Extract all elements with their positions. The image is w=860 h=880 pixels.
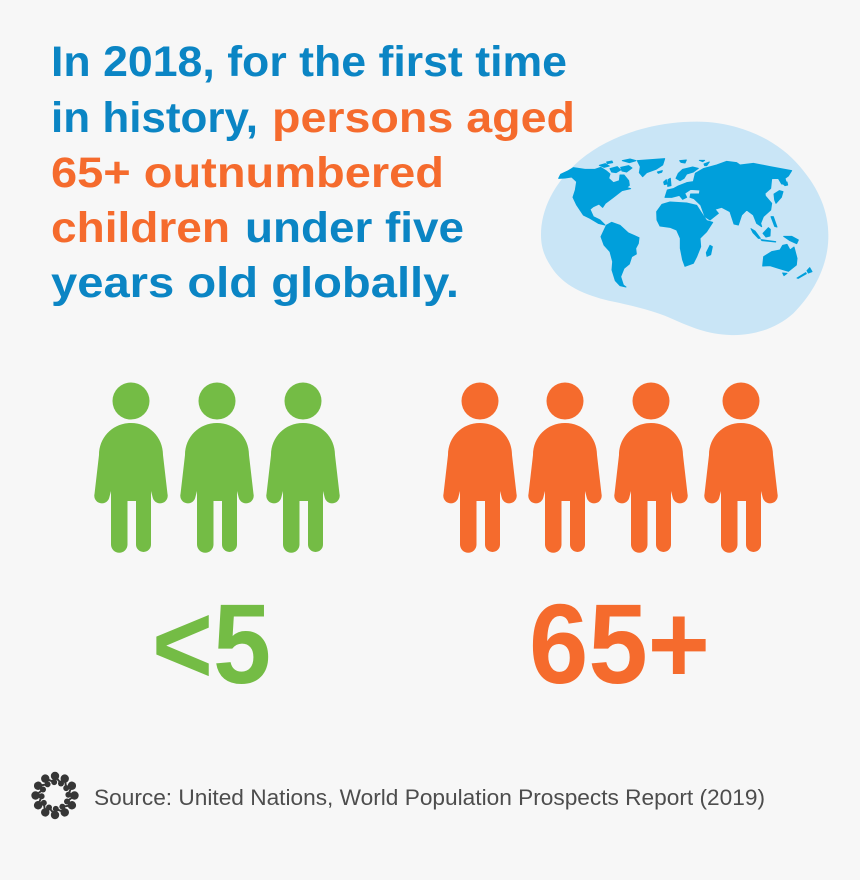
title: persons aged (272, 95, 575, 142)
title: 65+ outnumbered (51, 150, 444, 197)
source line: Source: United Nations, World Population Prospects Report (2019) (94, 785, 765, 810)
icon: green person 1 (94, 382, 168, 553)
title: under five (245, 205, 464, 252)
icon: logo ring (30, 770, 80, 821)
people group: under five (94, 382, 340, 553)
icon: green person 2 (180, 382, 254, 553)
label: under five: <5 (152, 581, 271, 707)
icon: orange person 3 (614, 382, 688, 553)
title: children (51, 205, 230, 252)
icon: world map on a pale blue blob (541, 122, 828, 335)
title (51, 39, 575, 307)
title: in history, (51, 95, 258, 142)
label: 65 plus: 65+ (529, 581, 710, 707)
icon: orange person 4 (704, 382, 778, 553)
people group: 65 plus (443, 382, 778, 553)
icon: orange person 2 (528, 382, 602, 553)
title: In 2018, for the first time (51, 39, 567, 86)
title: years old globally. (51, 260, 459, 307)
icon: green person 3 (266, 382, 340, 553)
icon: orange person 1 (443, 382, 517, 553)
